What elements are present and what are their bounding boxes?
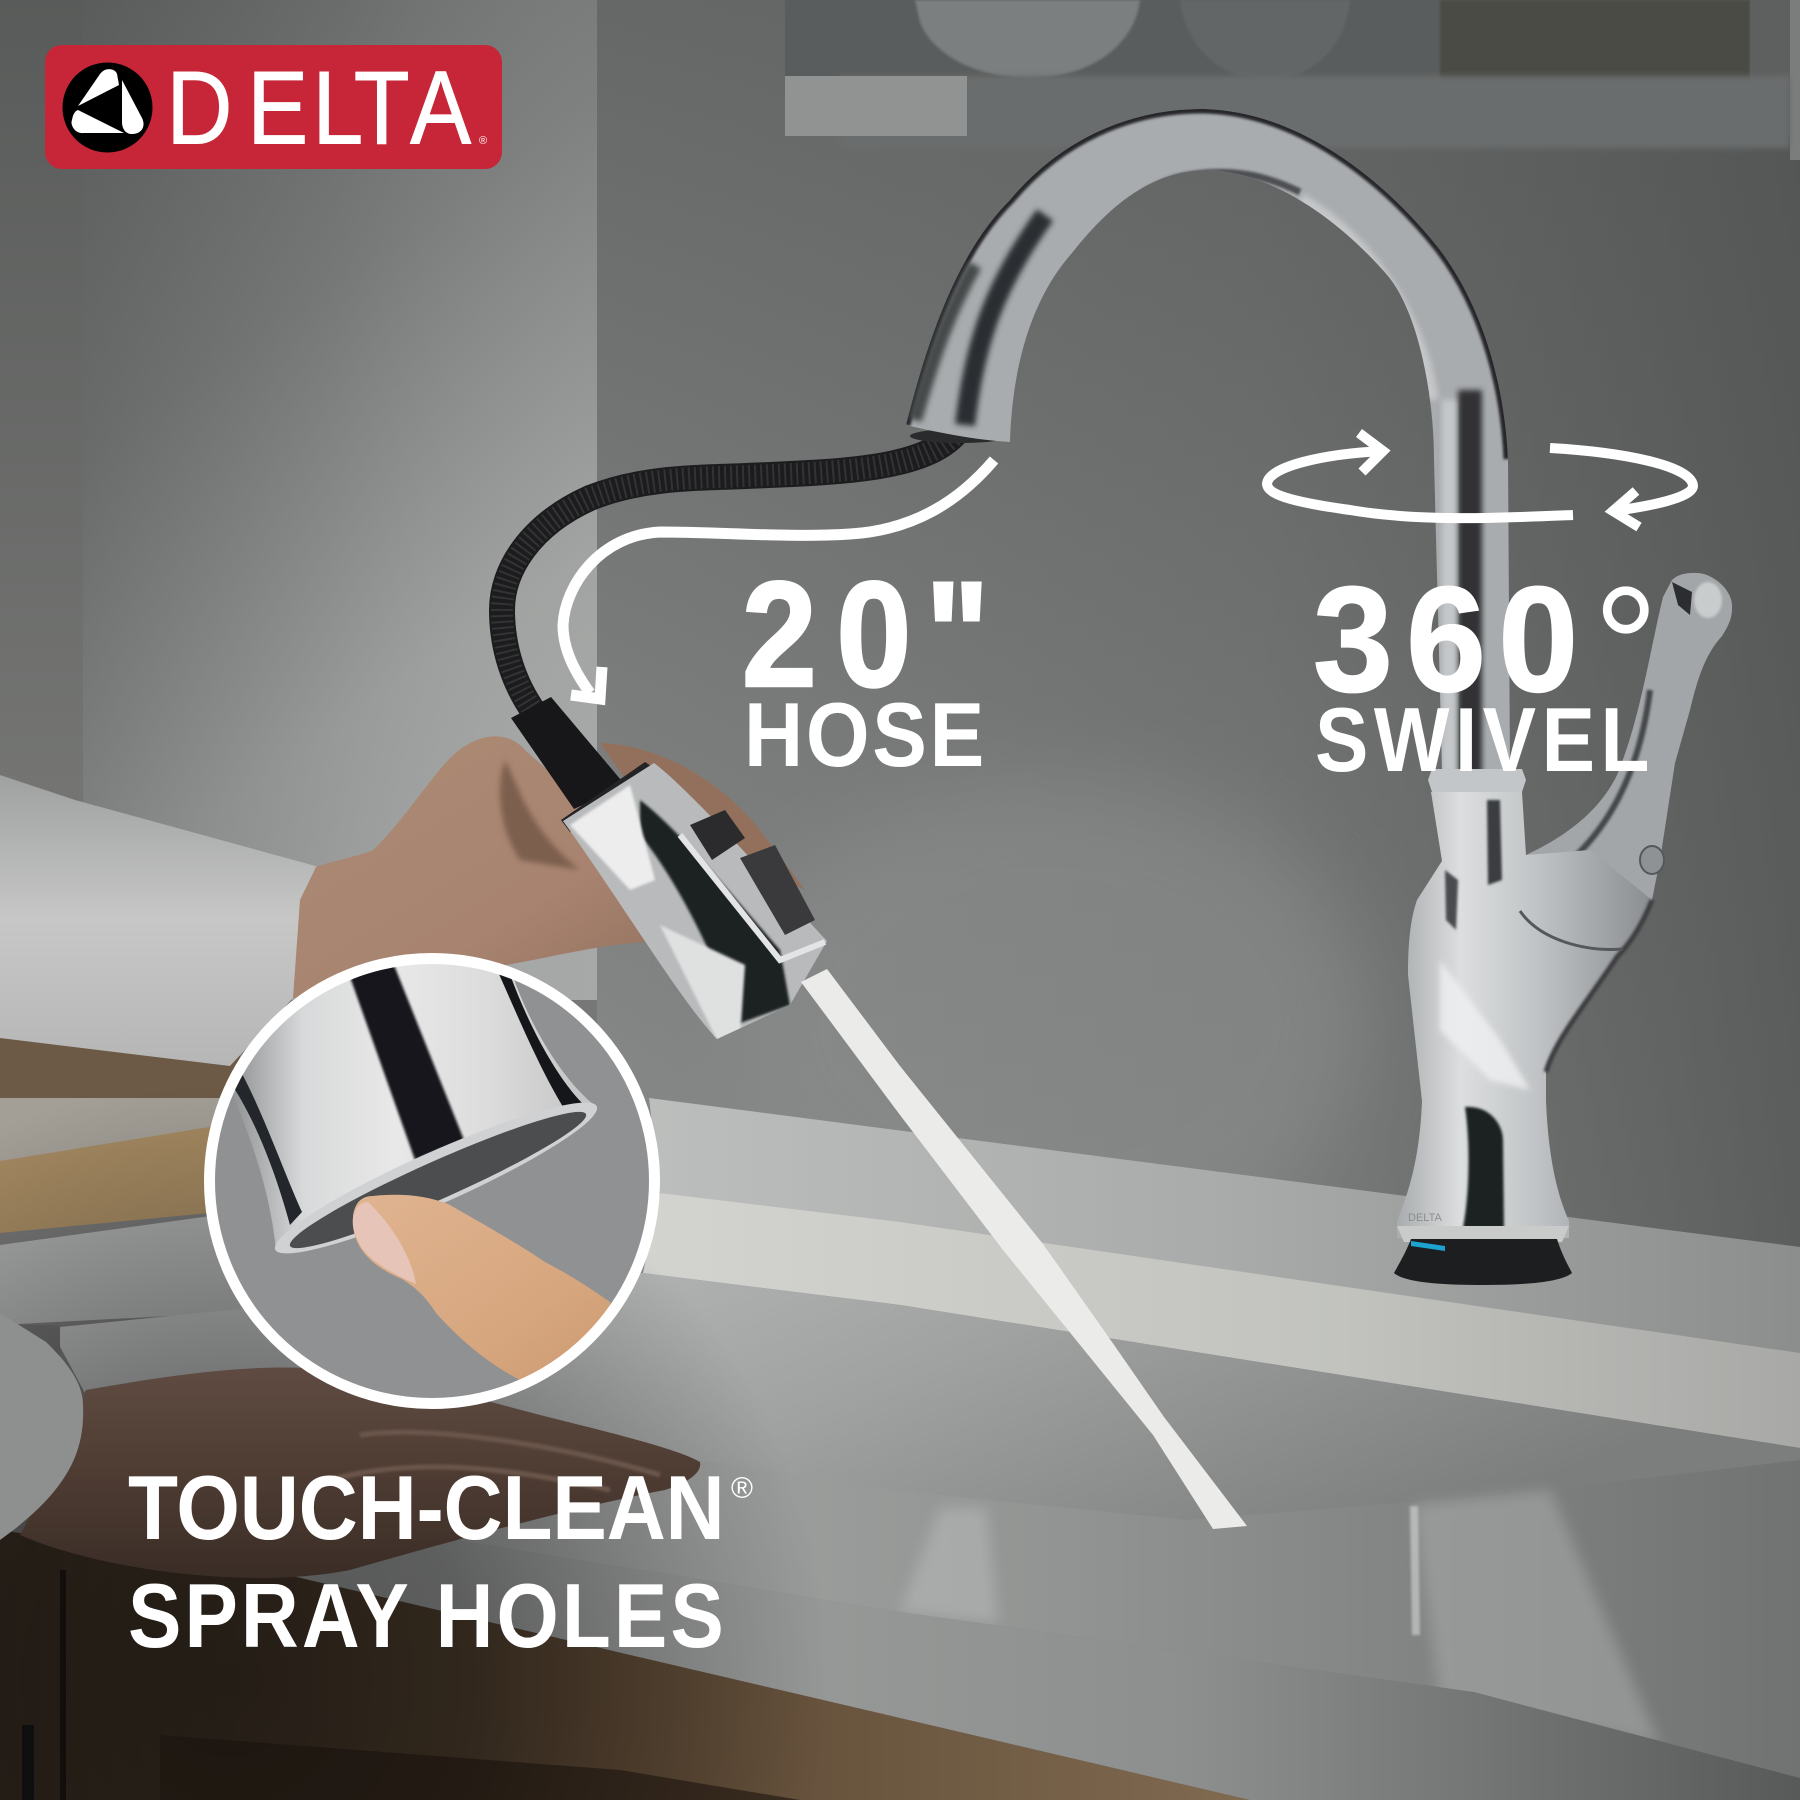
touch-clean spray holes callout <box>128 1458 753 1667</box>
handle tip dark <box>1672 582 1692 615</box>
360 degree number: 360 <box>1313 556 1578 724</box>
swivel rotation arrows <box>1267 433 1693 527</box>
pull-down spray head <box>563 763 827 1040</box>
touch-clean line: TOUCH-CLEAN <box>128 1458 725 1559</box>
swivel label: SWIVEL <box>1315 689 1649 791</box>
shelf <box>785 76 1790 148</box>
handle <box>1526 573 1732 920</box>
circle background <box>210 959 654 1403</box>
cup on shelf <box>915 0 1140 78</box>
sprayer chrome <box>230 950 597 1250</box>
body handle loop line <box>1520 911 1623 949</box>
connector flange <box>561 762 654 832</box>
spout dark outer edge <box>906 109 1508 459</box>
hand <box>20 1368 700 1578</box>
left wall panel <box>83 0 598 1000</box>
upper cabinet interior <box>785 0 1800 160</box>
triangular emblem <box>72 69 144 134</box>
zoom detail circle <box>210 950 654 1404</box>
base collar ring <box>1397 1226 1569 1242</box>
spray face holes <box>282 1097 594 1263</box>
arrow head right <box>1613 491 1639 527</box>
wall light glow <box>824 796 1360 1174</box>
circle content <box>230 950 640 1400</box>
left wall niche <box>0 0 83 662</box>
bowl on shelf <box>1182 2 1348 73</box>
hose length arrow <box>563 460 994 699</box>
registered mark: ® <box>731 1472 753 1505</box>
bottom-left darkening <box>0 1125 782 1800</box>
hose label: HOSE <box>744 685 984 786</box>
wood cabinet <box>0 1530 1250 1800</box>
body light diagonal <box>1440 960 1530 1090</box>
20 inch hose callout <box>742 551 989 786</box>
gooseneck spout <box>906 109 1510 770</box>
spray head light reflection <box>570 785 655 890</box>
360 degree number: ° <box>1593 552 1658 742</box>
left counter and cutting board <box>0 1035 320 1395</box>
black circle emblem <box>62 62 152 152</box>
spout dark streak <box>965 215 1045 425</box>
front counter reflection <box>1414 1490 1660 1745</box>
dark stripe left <box>232 1070 302 1225</box>
palm shadow <box>500 760 580 870</box>
faucet body <box>1397 792 1652 1238</box>
spray head chrome body <box>563 763 827 1039</box>
arrow head left <box>1359 433 1383 472</box>
arrow head <box>571 667 602 699</box>
arrow curve <box>563 460 994 693</box>
front counter reflection left <box>900 1508 998 1623</box>
spout vertical light <box>1442 400 1456 780</box>
counter edge face <box>643 1193 1800 1448</box>
body dark reflection upper <box>1487 800 1502 885</box>
Delta logo badge <box>45 45 502 169</box>
brand marking on faucet: DELTA <box>1408 1212 1442 1224</box>
water stream <box>801 969 1247 1529</box>
logo registered mark: ® <box>479 135 487 147</box>
rotation arrow right <box>1550 448 1693 511</box>
dark stripe right <box>495 960 582 1110</box>
right wall <box>597 0 1800 1300</box>
rotation arrow left <box>1267 451 1573 518</box>
sink basin <box>490 1273 1799 1520</box>
handle dark streak <box>1560 690 1650 870</box>
sprayer lip <box>265 1083 607 1273</box>
fingernail <box>353 1202 416 1284</box>
spray head dark reflection <box>640 800 790 1025</box>
thumb nail <box>655 904 716 943</box>
body dark small <box>1445 870 1458 930</box>
finger <box>353 1195 640 1400</box>
spout reflections <box>906 109 1508 780</box>
spray holes line: SPRAY HOLES <box>128 1565 724 1667</box>
spout left dark <box>915 265 975 420</box>
hose connector <box>511 697 626 809</box>
body right shadow edge <box>1546 900 1652 1072</box>
hose braid <box>502 432 957 712</box>
front counter glint <box>1410 1506 1420 1635</box>
collar <box>1428 769 1526 792</box>
body dark reflection lower <box>1463 1107 1504 1228</box>
head reflections <box>570 785 790 1040</box>
hot cold marker <box>1640 846 1664 874</box>
upper hand <box>293 736 718 998</box>
hose weave <box>502 432 957 712</box>
red badge <box>45 45 502 169</box>
20 inch number: 20" <box>742 551 989 719</box>
button dark upper <box>690 810 745 860</box>
spout inner shadow <box>1080 172 1300 255</box>
circle white ring <box>210 958 654 1404</box>
upper sleeve <box>0 775 319 1066</box>
button dark lower <box>740 845 815 935</box>
front counter face <box>275 1520 1800 1800</box>
front counter reflective top <box>456 1460 1800 1687</box>
360 swivel callout <box>1313 552 1658 791</box>
lower hand on counter <box>0 1313 700 1578</box>
DELTA wordmark: DELTA <box>166 49 472 166</box>
chrome rim edge <box>680 835 825 960</box>
counter top surface <box>649 1098 1800 1353</box>
dark stripe <box>344 960 464 1160</box>
handle tip highlight <box>1694 582 1722 618</box>
faucet <box>906 109 1732 1285</box>
spout tip end <box>910 429 1010 443</box>
LED indicator <box>1411 1241 1445 1251</box>
touch base <box>1394 1239 1572 1285</box>
flexible black hose <box>502 429 1010 832</box>
hand holding spray head <box>0 736 805 1066</box>
spout inner reflection <box>1300 200 1432 400</box>
upper hand fingers behind <box>600 743 805 890</box>
sleeve <box>0 1313 83 1540</box>
finger crease <box>330 1432 660 1490</box>
spray head lower highlight <box>660 925 745 1040</box>
spout vertical dark streak <box>1458 390 1482 780</box>
